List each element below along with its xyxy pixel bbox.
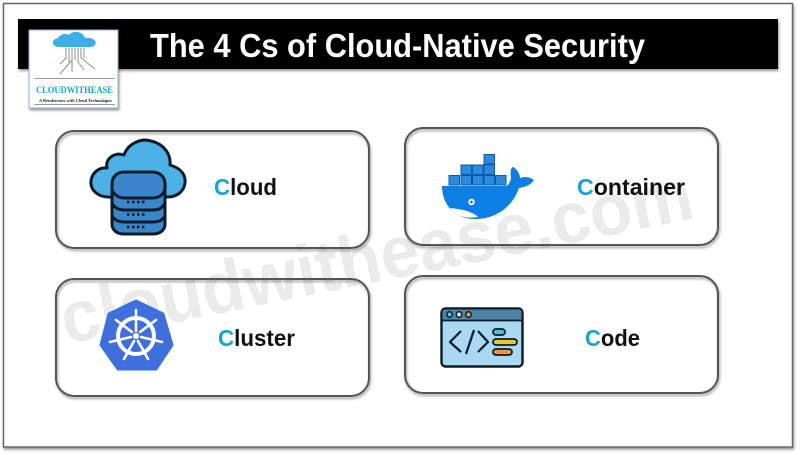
label: Container: Container bbox=[577, 174, 685, 200]
icon: cloud database bbox=[91, 140, 185, 234]
panel: Container bbox=[405, 128, 718, 245]
panel: Code bbox=[405, 276, 718, 393]
logo rule bbox=[34, 78, 115, 79]
icon: code window bbox=[442, 308, 522, 366]
logo bbox=[29, 30, 118, 108]
panel: Cloud bbox=[56, 131, 369, 248]
watermark: cloudwithease.com bbox=[53, 154, 700, 360]
label: Code: Code bbox=[585, 325, 640, 351]
logo lower rule bbox=[34, 104, 115, 105]
icon: docker whale bbox=[442, 154, 534, 219]
icon: containers bbox=[449, 154, 506, 185]
icon: server dots bbox=[127, 202, 147, 227]
icon: kubernetes helm bbox=[101, 301, 172, 369]
icon: logo cloud bbox=[53, 32, 96, 74]
title: The 4 Cs of Cloud-Native Security bbox=[150, 27, 646, 64]
title bar bbox=[18, 19, 778, 69]
logo tagline: A Rendezvous with Cloud Technologies bbox=[39, 98, 112, 103]
panel: Cluster bbox=[56, 279, 369, 396]
label: Cloud: Cloud bbox=[214, 174, 277, 200]
label: Cluster: Cluster bbox=[218, 325, 295, 351]
logo name: CLOUDWITHEASE bbox=[36, 85, 113, 96]
